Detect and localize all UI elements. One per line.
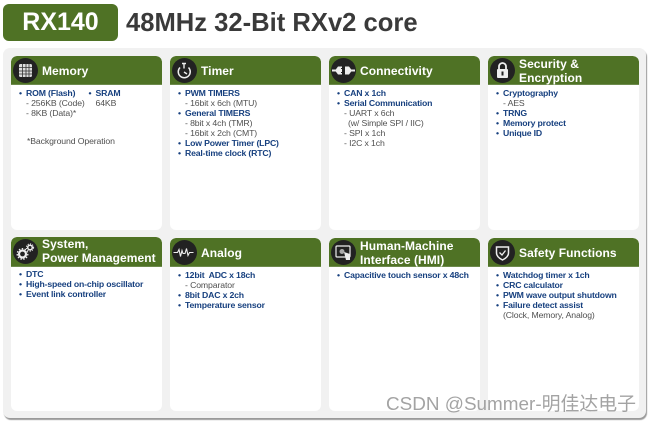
- list: security: Cryptography: [503, 88, 558, 98]
- list: timers: - 8bit x 4ch (TMR): [185, 118, 252, 128]
- list: safety: [496, 270, 617, 320]
- header: Security & Encryption: [488, 56, 639, 85]
- footnote: *Background Operation: [27, 136, 115, 146]
- list: SRAM: [88, 88, 120, 108]
- list: connectivity: CAN x 1ch: [344, 88, 386, 98]
- list: connectivity: [337, 88, 432, 148]
- header: System, Power Management: System,: [42, 237, 88, 251]
- header: Analog: [170, 238, 321, 267]
- list: safety: PWM wave output shutdown: [503, 290, 617, 300]
- title: core description: 48MHz 32-Bit RXv2 core: [126, 9, 418, 37]
- header: Timer: [170, 56, 321, 85]
- list: analog: 8bit DAC x 2ch: [185, 290, 244, 300]
- list: timers: Real-time clock (RTC): [185, 148, 271, 158]
- list: system: [19, 269, 144, 299]
- list: security: TRNG: [503, 108, 527, 118]
- header: Analog: Analog: [201, 246, 242, 260]
- list: analog: Temperature sensor: [185, 300, 265, 310]
- header: Connectivity: [329, 56, 480, 85]
- list: safety: CRC calculator: [503, 280, 563, 290]
- list: timers: Low Power Timer (LPC): [185, 138, 279, 148]
- list: ROM: [19, 88, 85, 118]
- panel: Analog: [170, 238, 321, 411]
- list: security: [496, 88, 566, 138]
- panel: System: [11, 237, 162, 411]
- list: system: High-speed on-chip oscillator: [26, 279, 143, 289]
- list: connectivity: (w/ Simple SPI / IIC): [348, 118, 424, 128]
- panel: HMI: [329, 238, 480, 411]
- list: SRAM: 64KB: [96, 98, 116, 108]
- list: ROM: ROM (Flash): [26, 88, 75, 98]
- header: System, Power Management: Power Management: [42, 251, 156, 265]
- list: ROM: - 8KB (Data)*: [26, 108, 76, 118]
- panel: Safety: [488, 238, 639, 411]
- icon: gears: [13, 239, 38, 264]
- icon: touch screen: [331, 240, 356, 265]
- header: System, Power Management: [11, 237, 162, 267]
- list: connectivity: Serial Communication: [344, 98, 432, 108]
- title badge: RX140: RX140: [22, 8, 99, 36]
- icon: stopwatch: [172, 58, 197, 83]
- panel: Connectivity: [329, 56, 480, 230]
- header: Connectivity: Connectivity: [360, 64, 433, 78]
- list: security: - AES: [503, 98, 525, 108]
- list: connectivity: - UART x 6ch: [344, 108, 394, 118]
- list: timers: General TIMERS: [185, 108, 250, 118]
- icon: waveform: [172, 240, 197, 265]
- list: timers: - 16bit x 2ch (CMT): [185, 128, 257, 138]
- list: system: Event link controller: [26, 289, 106, 299]
- header: Human-Machine Interface: [329, 238, 480, 267]
- header: Safety Functions: [488, 238, 639, 267]
- list: analog: [178, 270, 265, 310]
- header: Human-Machine Interface: Interface (HMI): [360, 253, 444, 267]
- header: Safety Functions: Safety Functions: [519, 246, 617, 260]
- title badge: RX140: [3, 4, 118, 41]
- list: timers: PWM TIMERS: [185, 88, 240, 98]
- list: connectivity: - I2C x 1ch: [344, 138, 385, 148]
- header: Memory: [11, 56, 162, 85]
- list: ROM: - 256KB (Code): [26, 98, 85, 108]
- icon: plug: [331, 58, 356, 83]
- list: security: Memory protect: [503, 118, 566, 128]
- list: system: DTC: [26, 269, 43, 279]
- list: timers: - 16bit x 6ch (MTU): [185, 98, 257, 108]
- header: Timer: Timer: [201, 64, 234, 78]
- header: Human-Machine Interface: Human-Machine: [360, 238, 453, 252]
- list: connectivity: - SPI x 1ch: [344, 128, 385, 138]
- icon: memory chip: [13, 58, 38, 83]
- header: Security & Encryption: Security &: [519, 56, 579, 70]
- list: safety: Watchdog timer x 1ch: [503, 270, 590, 280]
- list: safety: (Clock, Memory, Analog): [503, 310, 595, 320]
- list: analog: 12bit ADC x 18ch: [185, 270, 255, 280]
- header: Security & Encryption: Encryption: [519, 71, 582, 85]
- header: Memory: Memory: [42, 64, 88, 78]
- panel: Memory: [11, 56, 162, 230]
- list: SRAM: SRAM: [96, 88, 120, 98]
- panel: Timer: [170, 56, 321, 230]
- list: safety: Failure detect assist: [503, 300, 583, 310]
- icon: padlock: [490, 58, 515, 83]
- list: timers: [178, 88, 279, 158]
- list: security: Unique ID: [503, 128, 542, 138]
- list: HMI: Capacitive touch sensor x 48ch: [344, 270, 469, 280]
- watermark: CSDN @Summer-明佳达电子: [386, 394, 636, 415]
- list: analog: - Comparator: [185, 280, 235, 290]
- panel: Security: [488, 56, 639, 230]
- icon: shield: [490, 240, 515, 265]
